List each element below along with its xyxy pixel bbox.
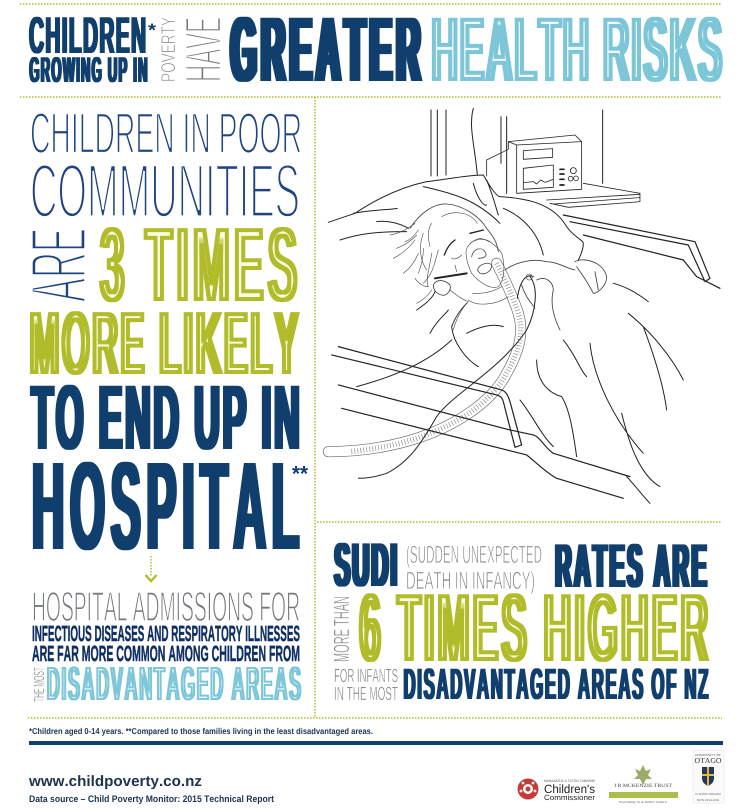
- text: disadvantaged areas: DISADVANTAGED AREAS: [47, 658, 303, 711]
- illustration: monitor: [487, 135, 640, 207]
- text: CHILDREN IN POOR: [30, 101, 302, 166]
- footer website: www.childpoverty.co.nz: [28, 773, 202, 790]
- logo: University of Otago: NEW ZEALAND: [697, 798, 720, 802]
- text: SUDI: SUDI: [334, 531, 399, 600]
- logo: Children's Commissioner: Commissioner: [544, 793, 596, 802]
- text: in the most: IN THE MOST: [334, 684, 398, 705]
- divider bar: [29, 741, 723, 745]
- text: death in infancy: DEATH IN INFANCY): [406, 567, 535, 595]
- illustration: poles: [431, 108, 603, 193]
- text: for infants: FOR INFANTS: [334, 666, 398, 687]
- logo: JR McKenzie Trust: Investing in a better future: [619, 800, 667, 804]
- arrow: down to admissions: [146, 556, 156, 581]
- logo: Children's Commissioner: Children's: [544, 782, 595, 796]
- text: HOSPITAL ADMISSIONS FOR: [32, 583, 300, 630]
- logo: Children's Commissioner: [518, 778, 596, 802]
- stat: more likely: MORE LIKELY: [30, 294, 301, 394]
- panel: SUDI statistic: (SUDDEN UNEXPECTED: [406, 541, 542, 569]
- text: disadvantaged areas of nz: DISADVANTAGED AREAS OF NZ: [404, 660, 710, 709]
- illustration: blanket and body: [357, 283, 683, 503]
- panel: hospital admissions: THE MOST: [31, 667, 48, 702]
- title: [29, 0, 724, 101]
- title: asterisk: *: [148, 20, 156, 40]
- illustration: child in hospital bed: [328, 108, 720, 503]
- panel: hospital admissions: [31, 583, 303, 711]
- title: greater: GREATER: [231, 0, 425, 101]
- text: hospital: HOSPITAL: [32, 437, 305, 576]
- panel: SUDI statistic: [329, 531, 711, 709]
- stat: 3 times: 3 TIMES: [100, 206, 301, 324]
- title: children: CHILDREN: [29, 7, 147, 65]
- illustration: child face and hands: [390, 204, 607, 330]
- illustration: breathing tube: [328, 263, 521, 452]
- title: health risks: HEALTH RISKS: [431, 0, 724, 101]
- logo: University of Otago: TE WHARE WANANGA: [695, 792, 721, 796]
- text: ARE FAR MORE COMMON AMONG CHILDREN FROM: [32, 641, 300, 666]
- text: INFECTIOUS DISEASES AND RESPIRATORY ILLNESSES: [32, 621, 300, 646]
- footnote: *Children aged 0-14 years. **Compared to those families living in the least disadvantaged areas.: [29, 726, 373, 736]
- logo: JR McKenzie Trust: J R MCKENZIE TRUST: [614, 783, 672, 789]
- panel: hospital statistic: COMMUNITIES: [30, 149, 300, 234]
- illustration: pillow and bedding: [328, 175, 583, 260]
- panel: hospital statistic: ARE: [14, 228, 103, 302]
- logo: JR McKenzie Trust: [609, 765, 678, 804]
- illustration: monitor wire: [358, 276, 535, 478]
- footnote marker: **: [292, 461, 308, 486]
- logo: University of Otago: OTAGO: [694, 756, 722, 765]
- text: more than: MORE THAN: [329, 596, 354, 662]
- stat: 6 times higher: 6 TIMES HIGHER: [359, 573, 711, 682]
- logo: University of Otago: UNIVERSITY OF: [695, 753, 721, 757]
- text: rates are: RATES ARE: [555, 532, 709, 601]
- text: to end up in: TO END UP IN: [32, 367, 302, 469]
- panel: hospital statistic: [14, 101, 308, 576]
- logo: Children's Commissioner: MANAAKITIA A TATOU TAMARIKI: [544, 779, 595, 783]
- logo: University of Otago: [693, 750, 724, 803]
- title: growing up in: GROWING UP IN: [29, 49, 149, 90]
- illustration: bed rails: [332, 215, 720, 498]
- footer data source: Data source – Child Poverty Monitor: 2015 Technical Report: [29, 794, 275, 805]
